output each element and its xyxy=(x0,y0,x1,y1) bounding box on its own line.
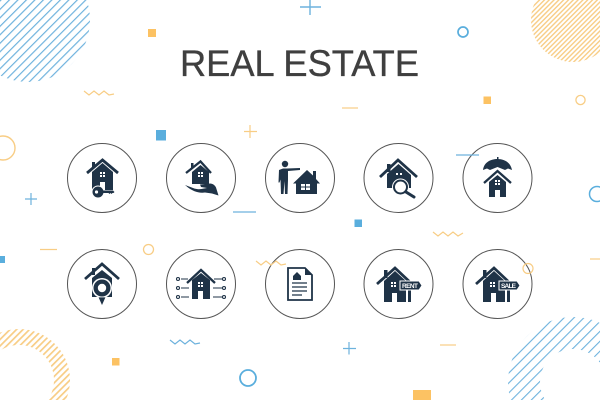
icon circle: house for rent: RENT xyxy=(402,283,418,290)
hatched circle: top left xyxy=(0,0,90,82)
icon circle: house for sale: SALE xyxy=(501,283,517,290)
title: REAL ESTATE xyxy=(180,43,419,84)
icon circle: house under umbrella xyxy=(463,144,532,212)
icon circle: agent pointing at house xyxy=(266,144,334,212)
icon circle: house with key xyxy=(68,144,136,212)
blue dash overlapping umbrella icon xyxy=(456,154,479,156)
icon circle: property document xyxy=(266,250,334,318)
icon circle: house location pin xyxy=(68,250,136,318)
icon circle: house search xyxy=(364,144,433,212)
hatched circle: top right xyxy=(531,0,600,62)
hatched ring: bottom left xyxy=(0,329,70,400)
orange ring overlapping sale icon xyxy=(523,264,533,274)
orange zigzag overlapping document icon xyxy=(256,261,286,265)
icon circle: house in hand xyxy=(166,144,236,212)
icon circle: house for rent xyxy=(364,250,433,318)
hatched ring: bottom right xyxy=(508,317,600,400)
icon circle: house for sale xyxy=(463,250,532,318)
icon circle: smart house circuit xyxy=(166,250,236,318)
